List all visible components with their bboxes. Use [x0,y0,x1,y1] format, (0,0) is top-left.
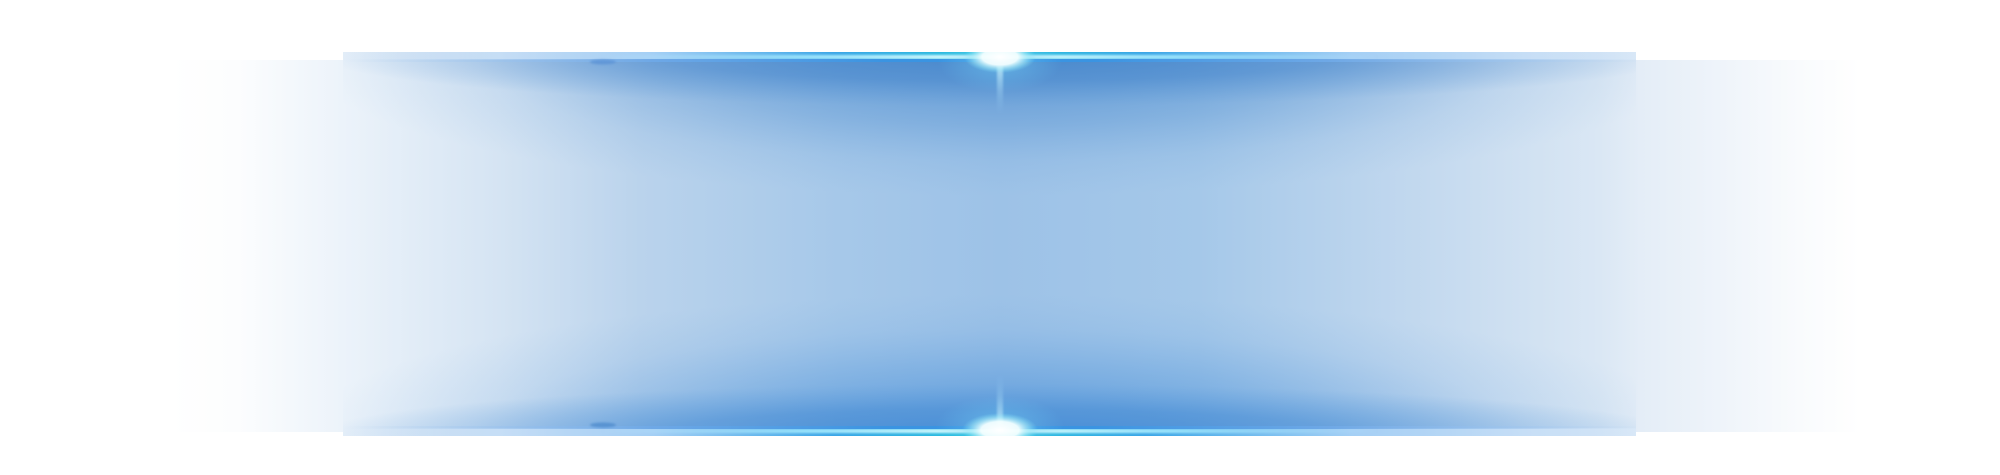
top light bar [343,52,1636,62]
bottom light bar [343,426,1636,436]
bottom shading [343,286,1636,436]
top shading [343,52,1636,202]
dark smudge top left [590,60,616,64]
background: faded outer band [170,60,1860,432]
banner graphic [271,52,1784,436]
panel: inner glow with top and bottom shading [343,52,1636,436]
top flare [948,52,1050,102]
dark smudge bottom left [590,422,616,428]
bottom flare [947,388,1052,436]
